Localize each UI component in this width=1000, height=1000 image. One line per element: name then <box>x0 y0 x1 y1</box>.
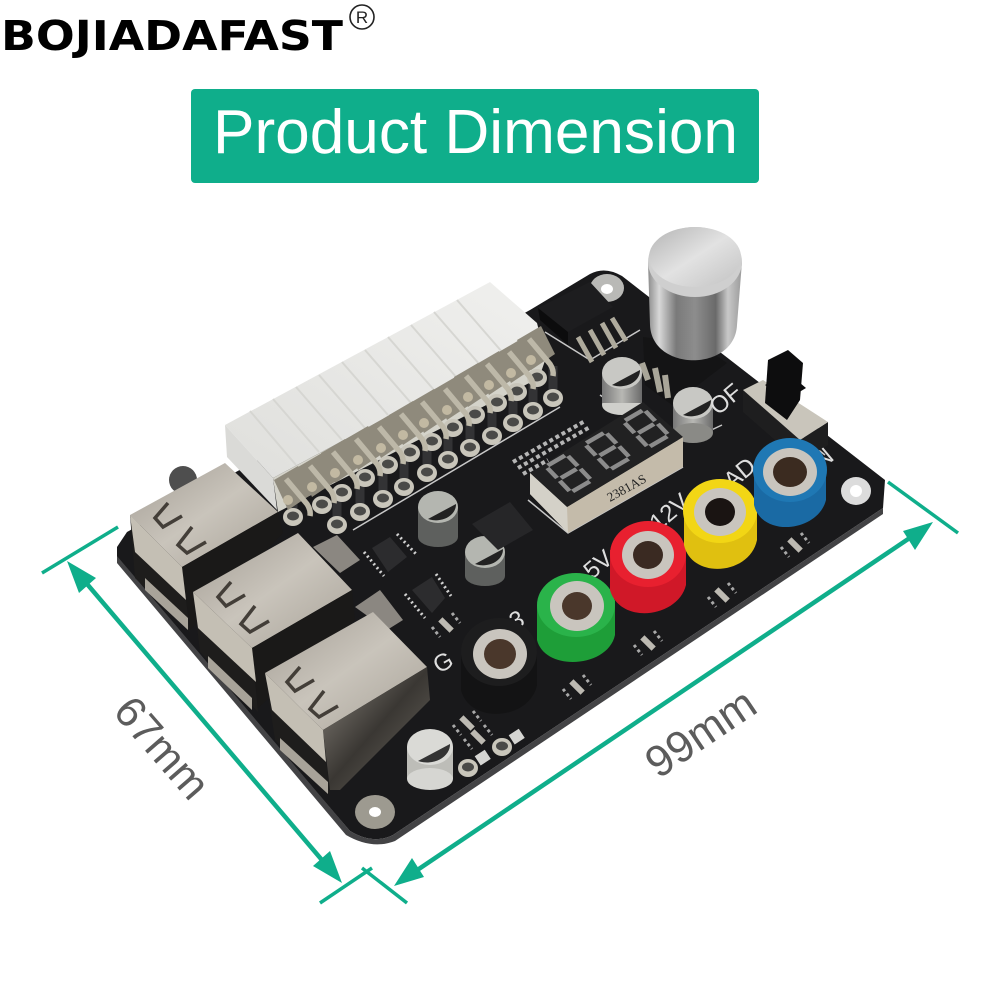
slide switch <box>743 350 828 462</box>
mounting holes <box>355 274 871 829</box>
connector pins <box>283 339 553 516</box>
binding post: red <box>610 521 686 613</box>
dimension: 99mm <box>362 482 958 903</box>
inductors <box>313 535 403 630</box>
USB port 1 <box>130 463 283 632</box>
board silkscreen labels: AD <box>719 452 761 495</box>
resistor label dots <box>513 421 590 474</box>
board silkscreen labels: 12V <box>645 488 695 537</box>
board silkscreen labels: G <box>428 646 458 679</box>
potentiometer knob <box>642 227 742 405</box>
SMD chips <box>364 502 533 618</box>
silkscreen outlines <box>353 330 825 533</box>
title banner: Product Dimension <box>213 98 738 167</box>
small SMD components <box>432 533 809 777</box>
board silkscreen labels: N <box>809 443 839 475</box>
dimension: 99mm: 99mm <box>636 679 765 788</box>
USB port 2 <box>193 533 355 712</box>
board silkscreen labels <box>428 378 839 679</box>
USB port 3 <box>265 612 430 795</box>
board silkscreen labels: 3 <box>505 605 529 635</box>
brand logo: R <box>356 8 368 27</box>
board body <box>117 270 885 839</box>
title banner <box>191 89 759 183</box>
board silkscreen labels: 5V <box>579 545 618 585</box>
binding post: black <box>461 618 537 714</box>
voltage regulator <box>538 282 626 362</box>
binding post: yellow <box>683 479 757 569</box>
board silkscreen labels: OF <box>705 378 747 421</box>
board pin rows <box>283 366 563 534</box>
seven-segment display: 2381AS <box>604 471 649 505</box>
binding post: green <box>537 573 615 662</box>
binding post: blue <box>753 438 827 527</box>
product: circuit board <box>117 227 885 844</box>
connector housing cells <box>274 326 555 510</box>
ATX power connector <box>225 282 548 512</box>
dimension: 67mm <box>42 527 372 903</box>
seven-segment display <box>530 402 683 533</box>
brand logo: BOJIADAFAST <box>1 12 343 60</box>
dimension: 67mm: 67mm <box>104 687 219 809</box>
capacitors <box>169 357 713 790</box>
